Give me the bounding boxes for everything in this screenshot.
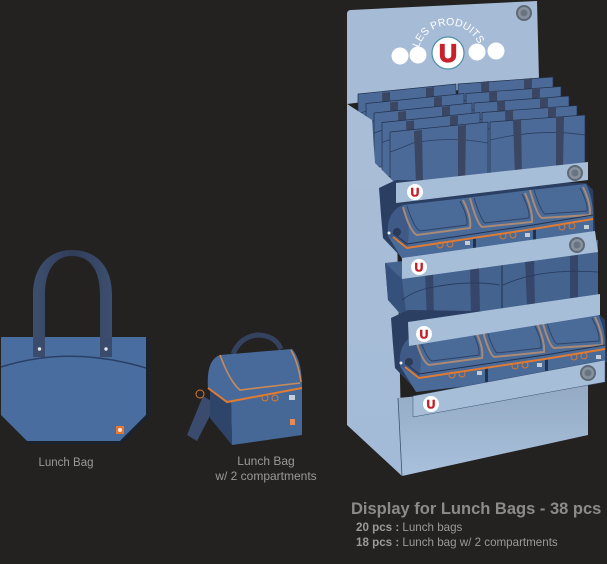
base front	[398, 380, 588, 476]
label: lunch bag w/ 2 compartments: w/ 2 compartments	[214, 469, 317, 483]
lunch bag with two compartments	[187, 335, 302, 445]
lower side	[210, 390, 232, 445]
rings	[196, 390, 278, 401]
shelf strip 4	[413, 360, 605, 417]
seal top	[516, 5, 532, 21]
strip 1	[396, 162, 588, 203]
bag body	[1, 337, 146, 441]
row 3 bags	[385, 240, 598, 322]
orange stripe	[208, 388, 302, 402]
strip 2 logos: U	[415, 260, 423, 274]
top shelf lunch bags	[358, 77, 585, 186]
bag seam	[1, 356, 146, 368]
shelf strip 2	[402, 231, 598, 279]
strip 3 logo	[416, 326, 432, 342]
tag	[290, 419, 295, 425]
back panel	[347, 1, 539, 104]
shoulder strap	[187, 396, 216, 441]
rivets	[38, 347, 108, 351]
panel: side	[347, 104, 402, 476]
lid	[208, 349, 302, 402]
quantity line 1: 20 pcs : Lunch bags	[356, 521, 463, 534]
quantity line 2: 18 pcs : Lunch bag w/ 2 compartments	[356, 536, 558, 549]
label: lunch bag w/ 2 compartments: Lunch Bag	[237, 454, 295, 468]
slogan: les produits: LES PRODUITS	[412, 18, 484, 47]
lid piping	[220, 350, 301, 390]
white dots	[392, 42, 504, 64]
strip 3 logo: U	[420, 328, 428, 342]
title: display: Display for Lunch Bags - 38 pcs	[351, 500, 601, 518]
label: lunch bag: Lunch Bag	[38, 457, 94, 469]
handle	[233, 335, 281, 354]
strip 4 logos: U	[427, 398, 435, 412]
U logo: U	[439, 40, 457, 68]
orange tag	[116, 426, 124, 434]
slogan path	[418, 25, 480, 54]
U logo	[432, 37, 464, 69]
row 4 bags	[391, 310, 607, 392]
base edge	[398, 398, 402, 476]
left side cover	[347, 104, 396, 203]
badge	[289, 395, 295, 400]
row 2 bags	[379, 180, 595, 262]
bag shadow edge	[27, 337, 149, 444]
strip 4 logos	[423, 365, 596, 412]
shelf strip 3	[408, 294, 600, 346]
bag strap tabs	[33, 337, 112, 357]
display stand	[347, 1, 607, 476]
strip 2 logos	[411, 237, 585, 275]
icon: bag handle	[33, 250, 112, 358]
lower body	[231, 387, 302, 445]
strip 1 logos: U	[411, 186, 419, 200]
strip 1 logos	[407, 165, 583, 200]
lunch bag product	[1, 250, 149, 444]
label: lunch bag w/ 2 compartments	[214, 454, 317, 483]
